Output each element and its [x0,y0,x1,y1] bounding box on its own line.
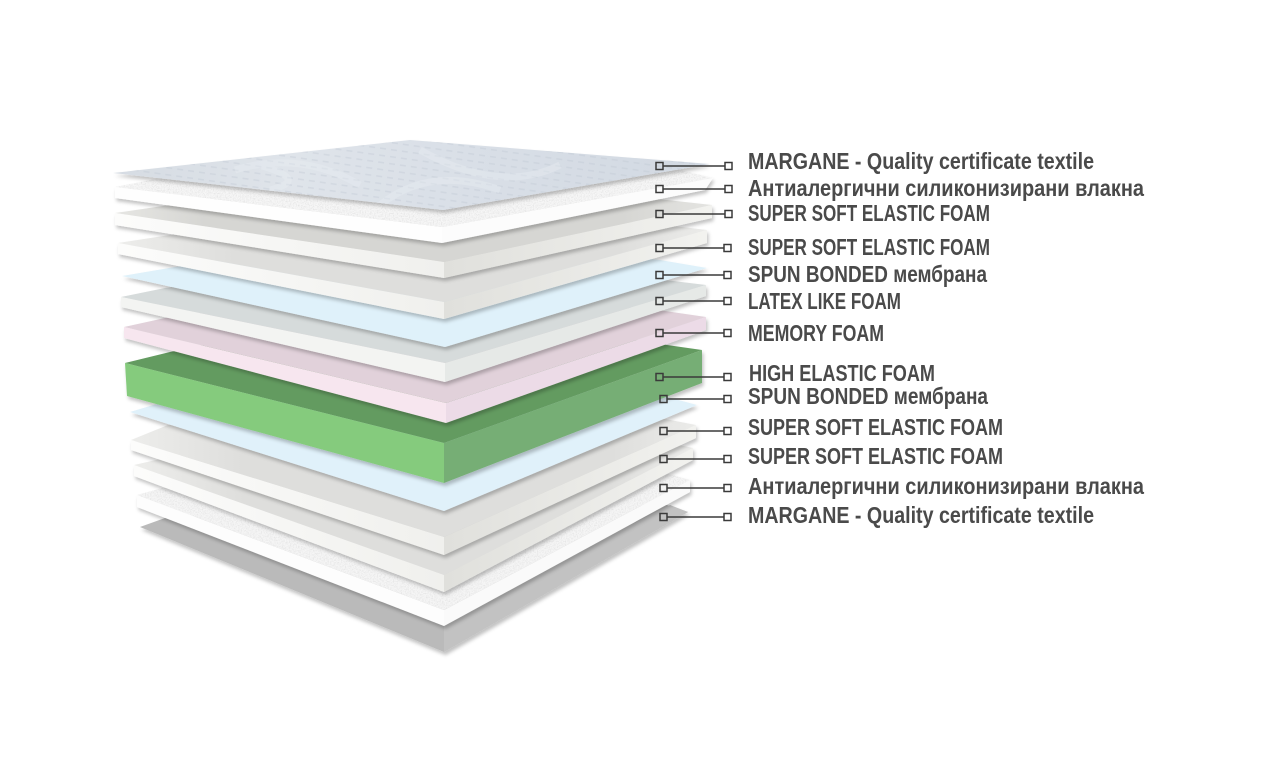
label: spun bonded lower: SPUN BONDED мембрана [748,383,988,409]
connector 9 [660,396,731,402]
layer: bottom antiallergic fibre [137,473,690,626]
layer: top antiallergic fibre [115,150,713,243]
layer: spun bonded membrane upper [122,233,707,347]
layer: super soft elastic foam 2 [118,200,707,319]
label: spun bonded upper: SPUN BONDED мембрана [748,261,987,287]
label: foam 1: SUPER SOFT ELASTIC FOAM [748,200,990,226]
connector 13 [660,514,731,520]
connector 3 [656,210,732,218]
label: latex like foam: LATEX LIKE FOAM [748,288,901,314]
label: memory foam: MEMORY FOAM [748,320,884,346]
label: foam 4: SUPER SOFT ELASTIC FOAM [748,443,1003,469]
connector 7 [656,330,731,336]
connector 5 [656,272,731,278]
connector 11 [660,456,731,462]
connector 12 [660,484,731,492]
layer: top quilted textile [113,140,710,210]
layer: super soft elastic foam 4 [134,420,693,592]
label: textile top: MARGANE - Quality certificate textile [748,148,1094,174]
connector 8 [656,374,731,380]
connector 6 [656,298,731,304]
label: fibre bottom: Антиалергични силиконизирани влакна [748,473,1144,499]
layer: spun bonded membrane lower [130,370,697,511]
label: foam 3: SUPER SOFT ELASTIC FOAM [748,414,1003,440]
label: foam 2: SUPER SOFT ELASTIC FOAM [748,234,990,260]
label: high elastic foam: HIGH ELASTIC FOAM [749,360,935,386]
connector 4 [656,244,731,252]
layer: super soft elastic foam 3 [131,395,696,555]
connector 10 [660,428,731,434]
layer: bottom textile [140,505,688,652]
mattress layer stack [113,140,713,652]
layer: memory foam [124,284,706,423]
connector 1 [656,162,732,170]
label: fibre top: Антиалергични силиконизирани влакна [748,175,1144,201]
layer: latex like foam [121,255,706,382]
layer: super soft elastic foam 1 [115,170,712,278]
connector 2 [656,186,732,192]
layer: high elastic foam [125,300,702,483]
label: textile bottom: MARGANE - Quality certificate textile [748,502,1094,528]
